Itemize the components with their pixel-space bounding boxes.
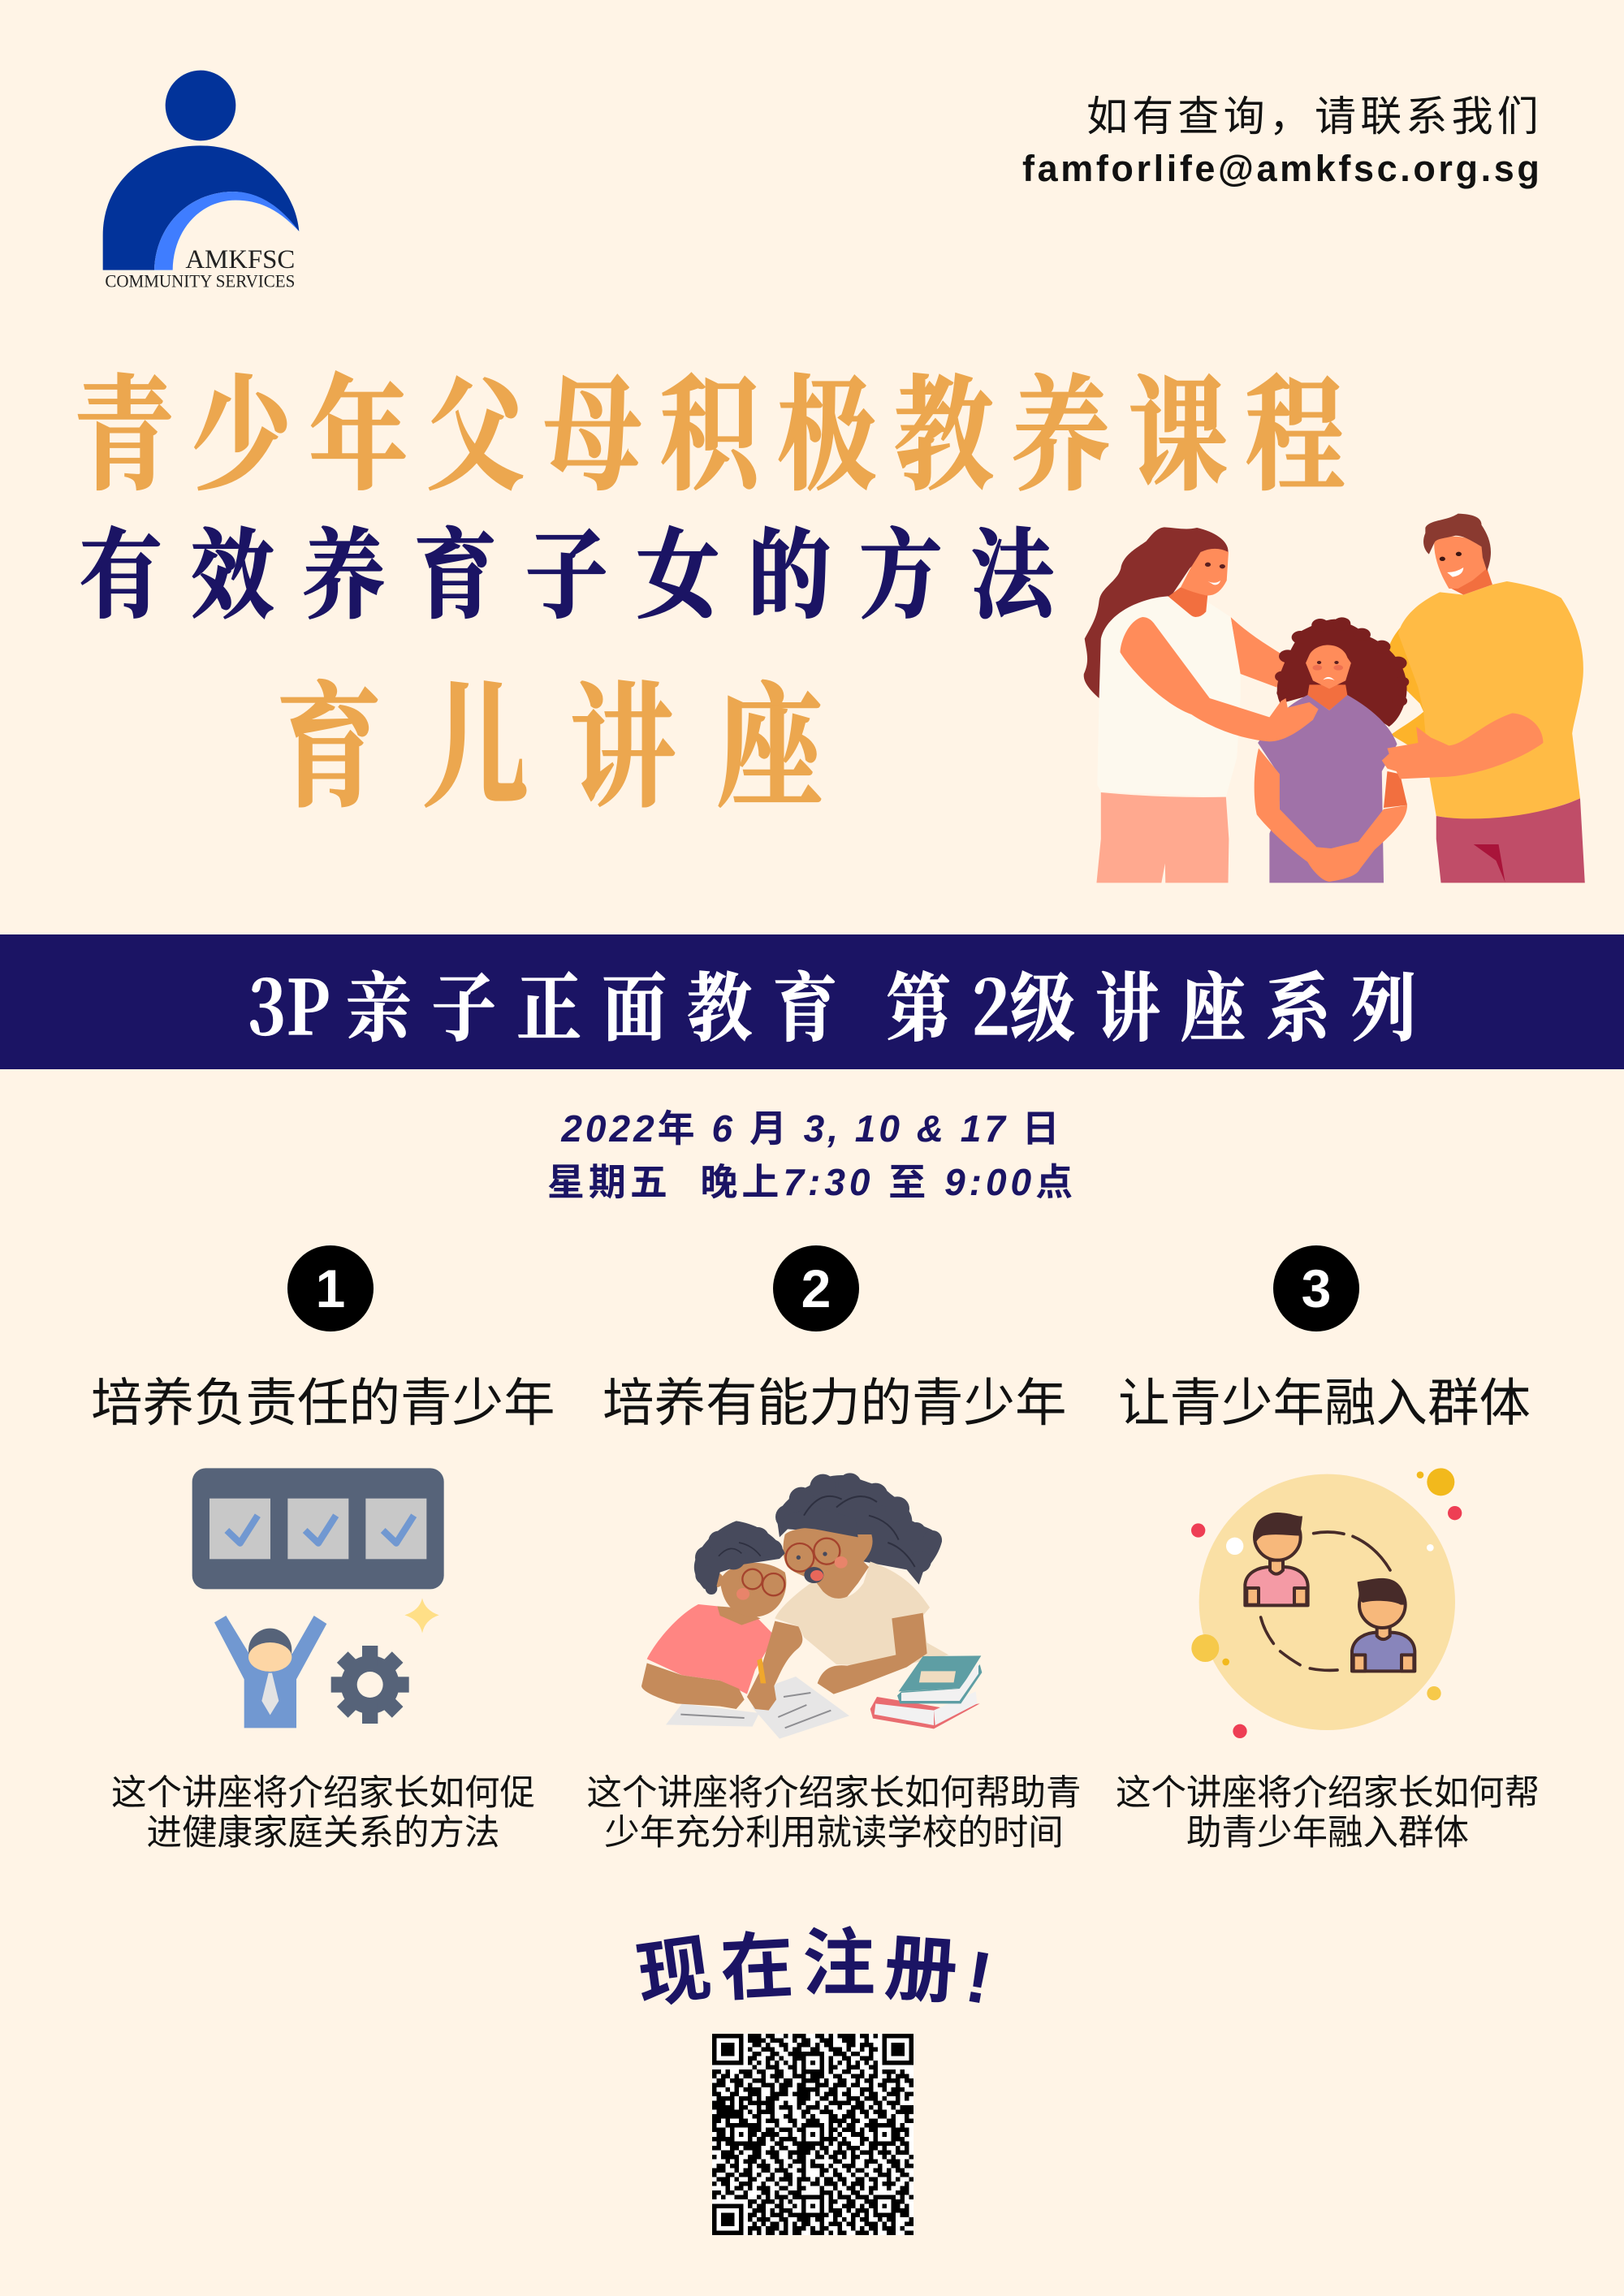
step 2 heading: 培养有能力的青少年 [603,1375,1067,1432]
step 3 heading: 让青少年融入群体 [1118,1375,1531,1432]
step 1 description [111,1774,535,1853]
icon: checklist, raised-arms person and gear [192,1468,444,1728]
step 2 description: 少年充分利用就读学校的时间 [604,1814,1064,1853]
icon: two people connected by dashed circle [1191,1468,1462,1738]
call to action: register now: 册 [882,1927,960,2013]
step 1 number [287,1245,374,1331]
logo: AMKFSC Community Services: AMKFSC [185,245,295,274]
contact email: famforlife@amkfsc.org.sg [1022,148,1542,189]
call to action: register now: ! [960,1936,998,2020]
woman hair [1084,527,1229,698]
man behind arm [1386,628,1454,757]
call to action: register now [632,1923,998,2020]
step 1 number: 1 [316,1258,345,1318]
step 2 description [586,1774,1082,1853]
step 1 heading: 培养负责任的青少年 [91,1375,555,1432]
illustration: family with parents comforting daughter [1083,513,1585,883]
call to action: register now: 在 [719,1926,796,2010]
step 3 number: 3 [1302,1258,1331,1318]
step 1 description: 这个讲座将介绍家长如何促 [111,1774,535,1813]
logo: AMKFSC Community Services [102,70,299,291]
step 2 number [773,1245,859,1331]
icon: mother helping child with homework [641,1473,983,1739]
man shirt [1398,581,1583,821]
step 3 description [1116,1774,1540,1853]
banner text: 3P亲子正面教育 第2级讲座系列 [248,948,1436,1056]
girl hair [1277,619,1407,727]
title: course name: 青少年父母积极教养课程 [75,336,1363,514]
step 3 description: 助青少年融入群体 [1186,1814,1469,1853]
step 2 description: 这个讲座将介绍家长如何帮助青 [586,1774,1082,1813]
man head [1449,568,1492,595]
call to action: register now: 现 [632,1928,715,2018]
woman arm [1120,617,1319,741]
heading: parenting talk: 育儿讲座 [276,641,864,834]
step 3 description: 这个讲座将介绍家长如何帮 [1116,1774,1540,1813]
person right [1352,1582,1415,1671]
subtitle: parenting methods: 有效养育子女的方法 [80,498,1082,637]
QR code [712,2034,914,2235]
logo: AMKFSC Community Services: COMMUNITY SERVICES [105,270,295,291]
person left [1245,1514,1308,1605]
step 3 number [1273,1245,1359,1331]
banner: series title [0,934,1624,1069]
contact heading: 如有查询，请联系我们 [1086,93,1543,140]
time line: 星期五 晚上7:30 至 9:00点 [547,1161,1077,1203]
date line: 2022年 6 月 3, 10 & 17 日 [561,1107,1063,1150]
step 2 number: 2 [801,1258,831,1318]
step 1 description: 进健康家庭关系的方法 [146,1814,500,1853]
call to action: register now: 注 [802,1923,875,2005]
